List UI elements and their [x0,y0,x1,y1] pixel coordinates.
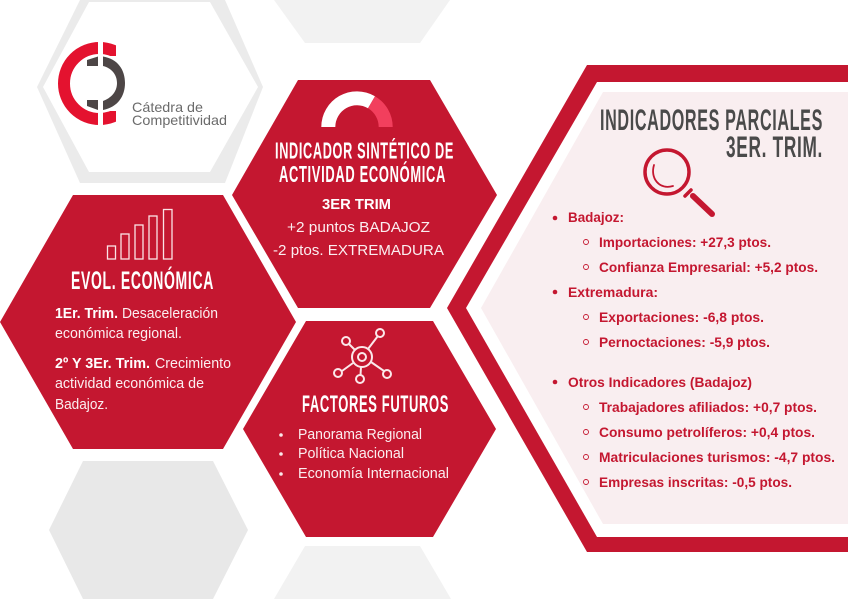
text block: evolution notes: 2º Y 3Er. Trim. [55,355,150,372]
text block: evolution notes: Crecimiento [155,355,231,372]
list: factors: Panorama Regional [298,426,422,443]
list: factors: Política Nacional [298,445,404,462]
icon: magnifier [645,150,712,214]
text block: evolution notes [55,305,231,413]
list: factors [279,426,449,482]
list: indicators: Confianza Empresarial: +5,2 ptos. [599,259,818,275]
logo text: Cátedra de [132,99,203,115]
heading [275,136,454,187]
list: indicators: Importaciones: +27,3 ptos. [599,234,771,250]
heading: ACTIVIDAD ECONÓMICA [279,160,446,187]
list: indicators: Consumo petrolíferos: +0,4 ptos. [599,424,815,440]
logo text [132,99,227,128]
text block: values [273,196,444,259]
decorative bottom center gray hexagon [274,546,451,599]
panel: indicadores parciales [447,65,848,552]
icon: network [334,329,391,383]
decorative bottom left gray hexagon [49,461,248,599]
text block: evolution notes: actividad económica de [55,375,204,392]
heading [600,104,823,164]
list: indicators: Extremadura: [568,284,658,300]
text block: evolution notes: Badajoz. [55,396,108,413]
panel: factores futuros [243,321,496,537]
list: indicators: Empresas inscritas: -0,5 ptos. [599,474,792,490]
heading: FACTORES FUTUROS [302,391,449,418]
decorative top gray hexagon [274,0,450,43]
icon: bar chart [108,210,172,259]
logo text: Competitividad [132,112,227,128]
list: indicators: Badajoz: [568,209,624,225]
list: indicators: Matriculaciones turismos: -4,7 ptos. [599,449,835,465]
list: indicators: Pernoctaciones: -5,9 ptos. [599,334,770,350]
list: indicators [553,209,835,490]
list: factors: Economía Internacional [298,465,449,482]
icon: logo mark [64,48,135,119]
list: indicators: Otros Indicadores (Badajoz) [568,374,752,390]
text block: evolution notes: económica regional. [55,325,182,342]
panel: indicador sintetico [232,80,497,308]
text block: evolution notes: Desaceleración [122,305,218,322]
heading: EVOL. ECONÓMICA [71,265,214,295]
text block: values: +2 puntos BADAJOZ [287,219,430,236]
panel: evolucion economica [0,195,296,449]
list: indicators: Trabajadores afiliados: +0,7 ptos. [599,399,817,415]
panel: logo hexagon [37,0,263,183]
list: indicators: Exportaciones: -6,8 ptos. [599,309,764,325]
heading: INDICADOR SINTÉTICO DE [275,136,454,164]
icon: gauge [321,91,393,127]
text block: values: -2 ptos. EXTREMADURA [273,242,444,259]
text block: values: 3ER TRIM [322,196,391,213]
text block: evolution notes: 1Er. Trim. [55,305,118,322]
